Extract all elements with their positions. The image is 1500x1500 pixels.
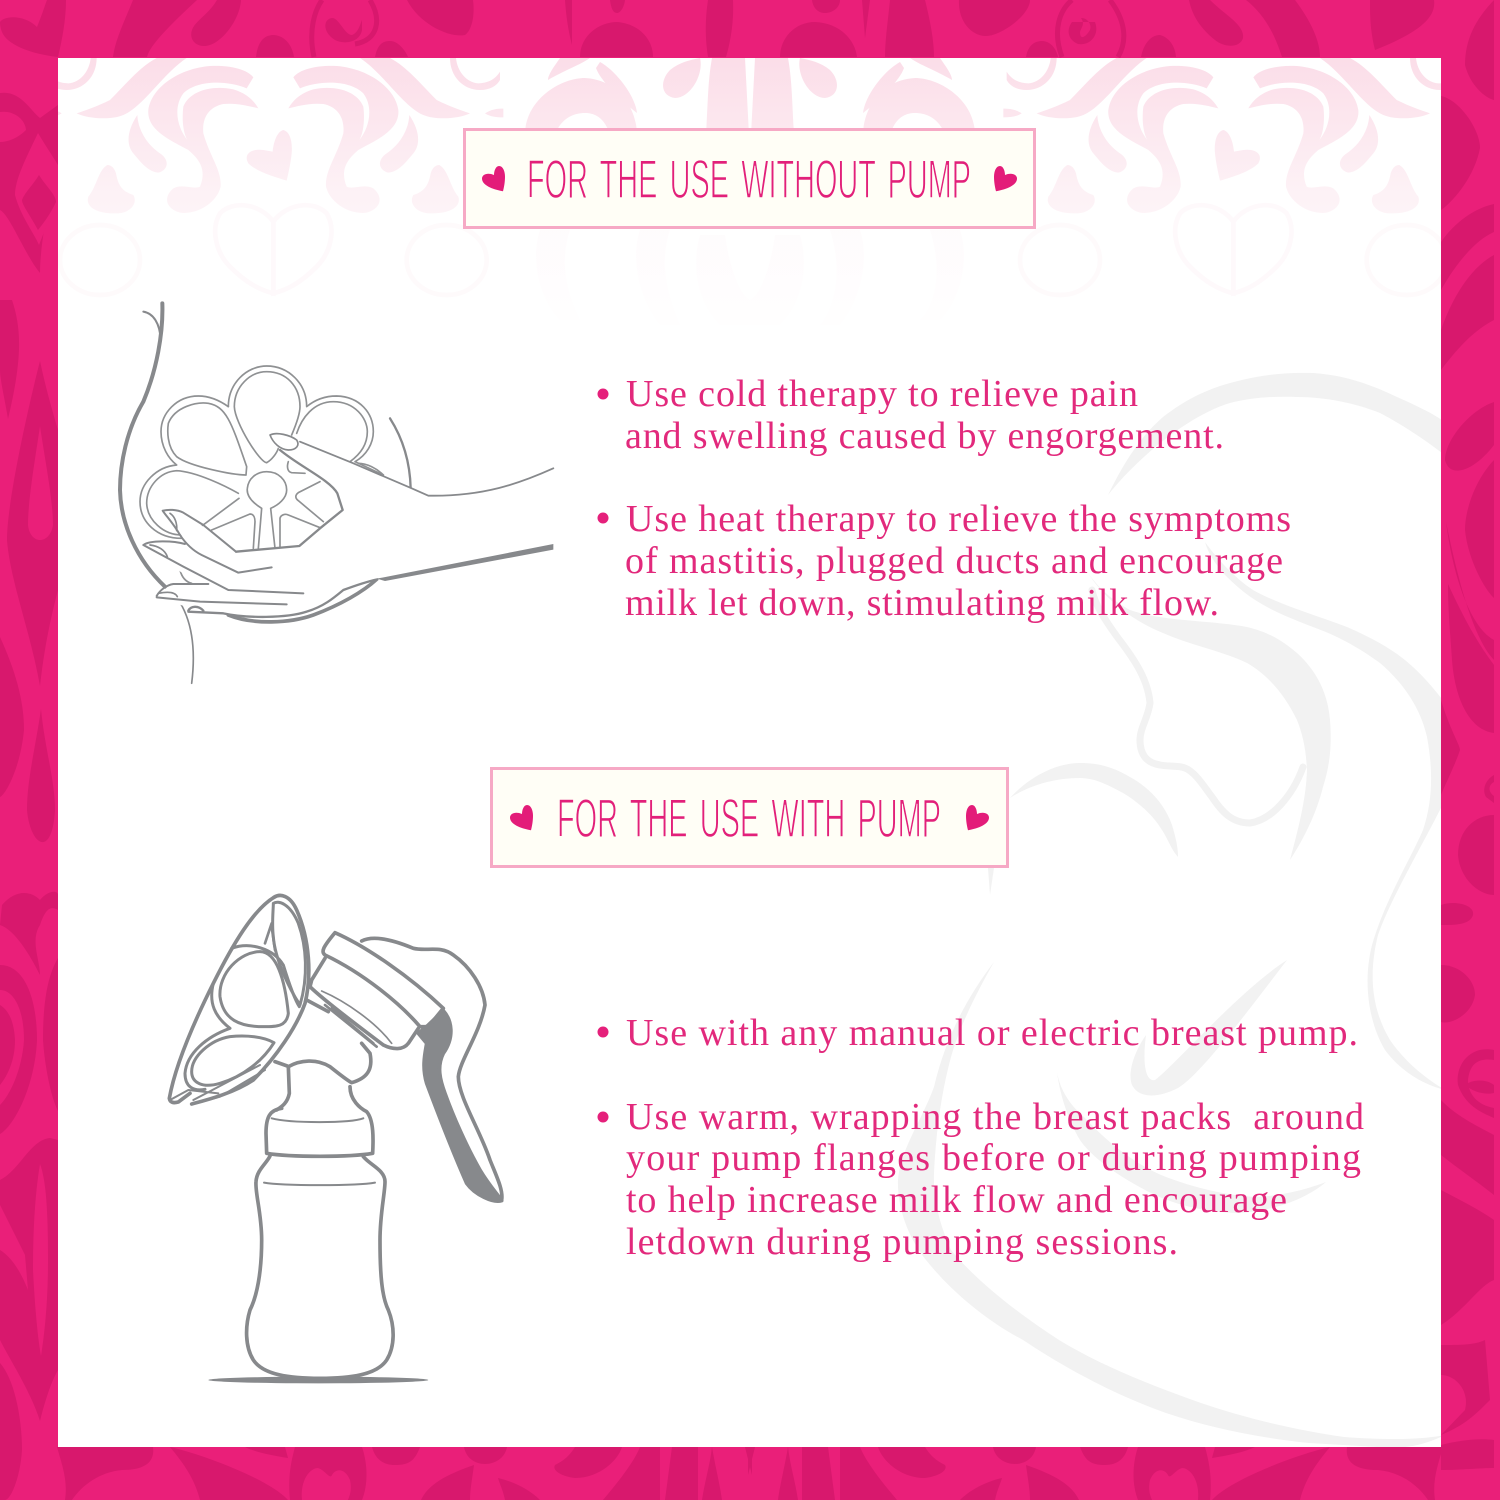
right border damask pattern [1441,96,1494,1470]
shadow [208,1377,428,1383]
left damask motif [58,58,504,214]
bullet 1: Use cold therapy to relieve pain [626,373,1138,415]
inner crescent [1088,573,1331,860]
bullet 4: your pump flanges before or during pumping [626,1137,1361,1179]
flower-shaped breast pad [140,366,383,583]
baby head arc [1010,763,1178,857]
heart icon right [966,805,989,830]
mother face line [1092,590,1303,823]
bullet 1: and swelling caused by engorgement. [625,415,1224,457]
bullet 1 [598,373,1224,457]
bottom border damask pattern [57,1447,1443,1500]
bottle [247,1087,393,1378]
baby lower crescent [1057,1072,1326,1213]
body outline [120,303,411,683]
bullet 4 [598,1096,1364,1263]
bullet 4: to help increase milk flow and encourage [626,1179,1287,1221]
background: faded pink damask at top of panel [43,58,1463,325]
bullet 2: Use heat therapy to relieve the symptoms [626,498,1291,540]
heading: for the use with pump [492,768,1008,866]
bullet 2 [598,498,1291,624]
bullet 3: Use with any manual or electric breast pump. [626,1012,1358,1054]
heart icon left [510,805,533,830]
pump head and handle [310,933,502,1201]
heading box [464,130,1034,228]
heading box [492,768,1008,866]
bullet list: with pump [598,1012,1364,1263]
mother head arc [1108,373,1442,495]
heart icon left [482,166,505,191]
top border damask pattern [0,0,1494,100]
illustration: hands placing flower-shaped pad on breast [120,303,553,683]
bullet 2: of mastitis, plugged ducts and encourage [625,540,1283,582]
breast shield with pad [169,895,309,1104]
bullet 4: Use warm, wrapping the breast packs around [626,1096,1364,1138]
left border damask pattern [0,93,58,1500]
illustration: manual breast pump with flower pad [169,895,502,1383]
pump body neck [275,1000,377,1110]
heading text: FOR THE USE WITH PUMP [557,787,941,849]
heart icon right [994,166,1017,191]
baby body large sweep [898,962,1445,1448]
right damask motif [1003,58,1441,214]
bullet 4: letdown during pumping sessions. [626,1221,1178,1263]
background: pale grey mother and baby silhouette strokes [898,373,1445,1448]
bullet 2: milk let down, stimulating milk flow. [625,582,1219,624]
central damask motif [525,58,975,325]
baby hand detail [1131,960,1287,1096]
hand [143,434,553,617]
mother shoulder and back [1205,542,1445,1090]
heading text: FOR THE USE WITHOUT PUMP [527,148,971,210]
bullet list: without pump [598,373,1291,624]
heading: for the use without pump [464,130,1034,228]
